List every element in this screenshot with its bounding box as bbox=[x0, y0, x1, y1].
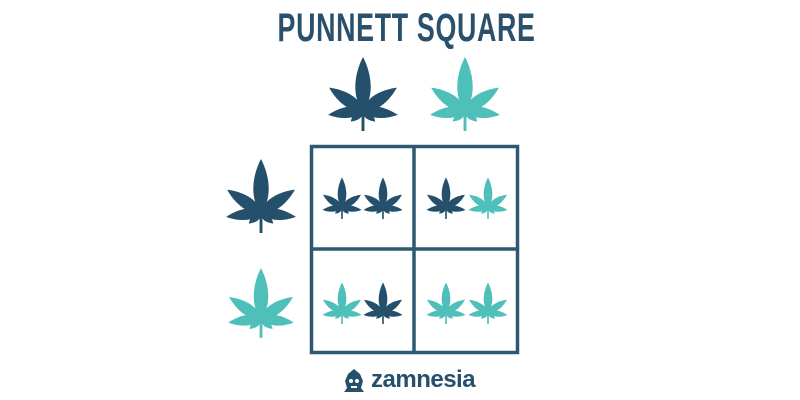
logo bbox=[344, 366, 476, 393]
icon: top dark leaf bbox=[326, 57, 400, 131]
icon: left teal leaf bbox=[226, 268, 296, 338]
icon: top teal leaf bbox=[428, 57, 502, 131]
icon: left dark leaf bbox=[224, 159, 298, 233]
punnett grid bbox=[311, 146, 518, 353]
icon: logo mask bbox=[344, 369, 364, 392]
cell: top-left bbox=[321, 178, 404, 219]
cell: top-right bbox=[425, 178, 509, 219]
logo text: zamnesia bbox=[371, 366, 475, 393]
cell: bottom-left bbox=[321, 283, 404, 324]
cell: bottom-right bbox=[425, 283, 509, 324]
title: PUNNETT SQUARE bbox=[278, 6, 536, 50]
